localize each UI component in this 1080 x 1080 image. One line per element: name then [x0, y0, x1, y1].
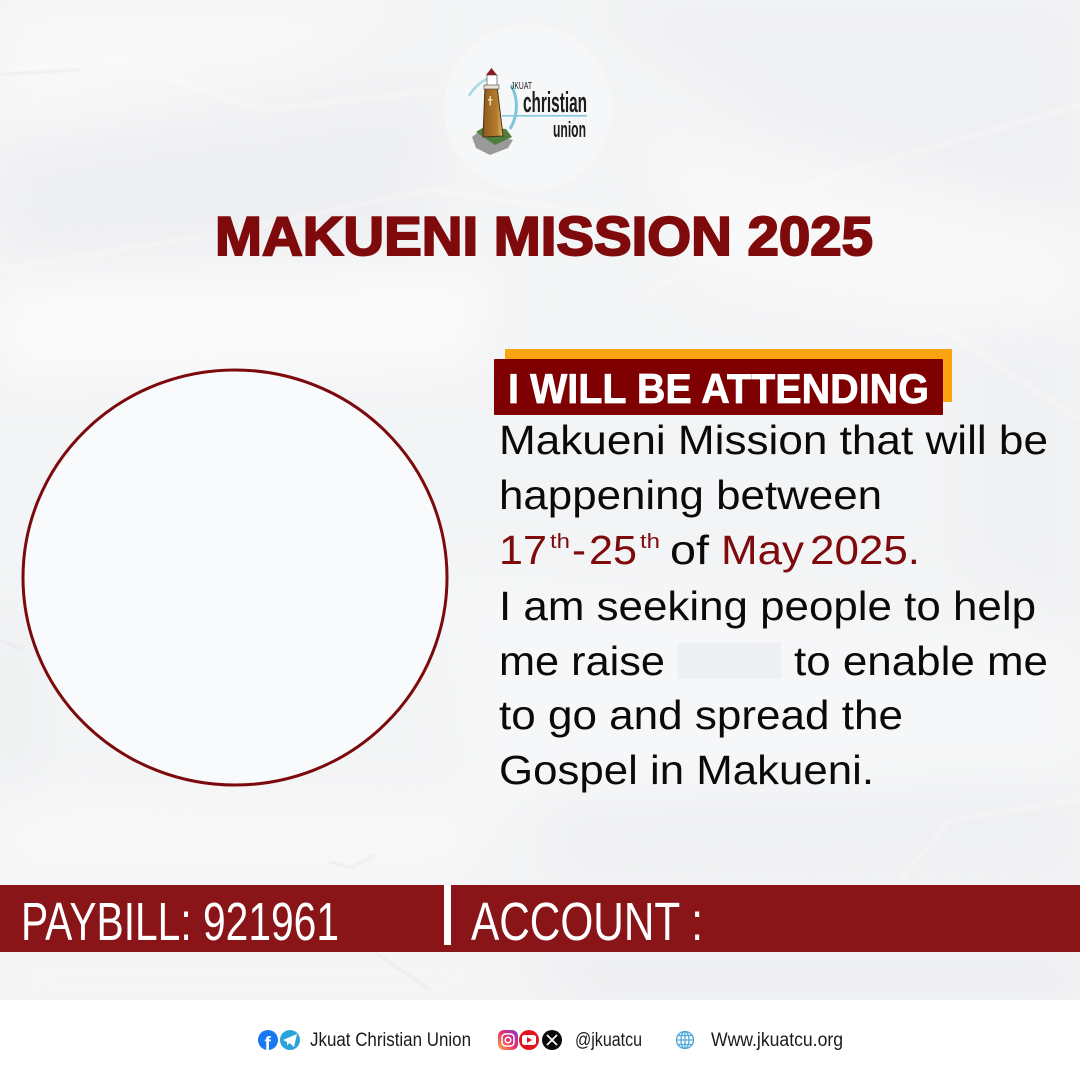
attending badge: [494, 349, 952, 415]
icon: facebook: f: [264, 1034, 272, 1055]
body text: Makueni Mission that will be: [499, 417, 1048, 463]
icon: x: [542, 1030, 562, 1050]
icon: globe: [676, 1032, 694, 1048]
dates line: of: [670, 527, 710, 573]
icon: lighthouse: [469, 68, 516, 155]
logo wordmark: christian: [523, 87, 587, 119]
handle: @jkuatcu: [575, 1030, 642, 1051]
payment bar: [0, 885, 1080, 952]
dates line: 25: [589, 527, 637, 573]
icon: telegram: [280, 1030, 300, 1050]
attending badge: I WILL BE ATTENDING: [508, 365, 929, 412]
label: facebook and telegram: Jkuat Christian Union: [310, 1030, 471, 1051]
dates line: 2025.: [810, 527, 920, 573]
photo circle: [23, 370, 447, 785]
footer band: [0, 1000, 1080, 1080]
body text: me raise: [499, 638, 665, 684]
title: MAKUENI MISSION 2025: [215, 205, 873, 267]
website: Www.jkuatcu.org: [711, 1030, 843, 1051]
payment bar: PAYBILL: 921961: [21, 892, 339, 952]
dates line: 17: [499, 527, 547, 573]
body text: to go and spread the: [499, 692, 903, 738]
icon: youtube: [519, 1030, 539, 1050]
body text: [499, 417, 1048, 793]
icon: instagram: [498, 1030, 518, 1050]
dates line: th: [640, 531, 660, 553]
logo wordmark: union: [553, 117, 586, 142]
body text: Gospel in Makueni.: [499, 747, 874, 793]
redacted amount: [678, 643, 781, 679]
logo badge: [444, 24, 612, 192]
dates line: -: [572, 527, 586, 573]
body text: I am seeking people to help: [499, 583, 1036, 629]
logo wordmark: [502, 81, 587, 142]
dates line: [499, 527, 920, 573]
body text: to enable me: [794, 638, 1048, 684]
dates line: th: [550, 531, 570, 553]
icon: facebook: [258, 1030, 278, 1055]
logo wordmark: JKUAT: [511, 81, 532, 92]
dates line: May: [721, 527, 805, 573]
payment bar: ACCOUNT :: [471, 892, 703, 952]
social footer: [258, 1030, 843, 1055]
body text: happening between: [499, 472, 882, 518]
